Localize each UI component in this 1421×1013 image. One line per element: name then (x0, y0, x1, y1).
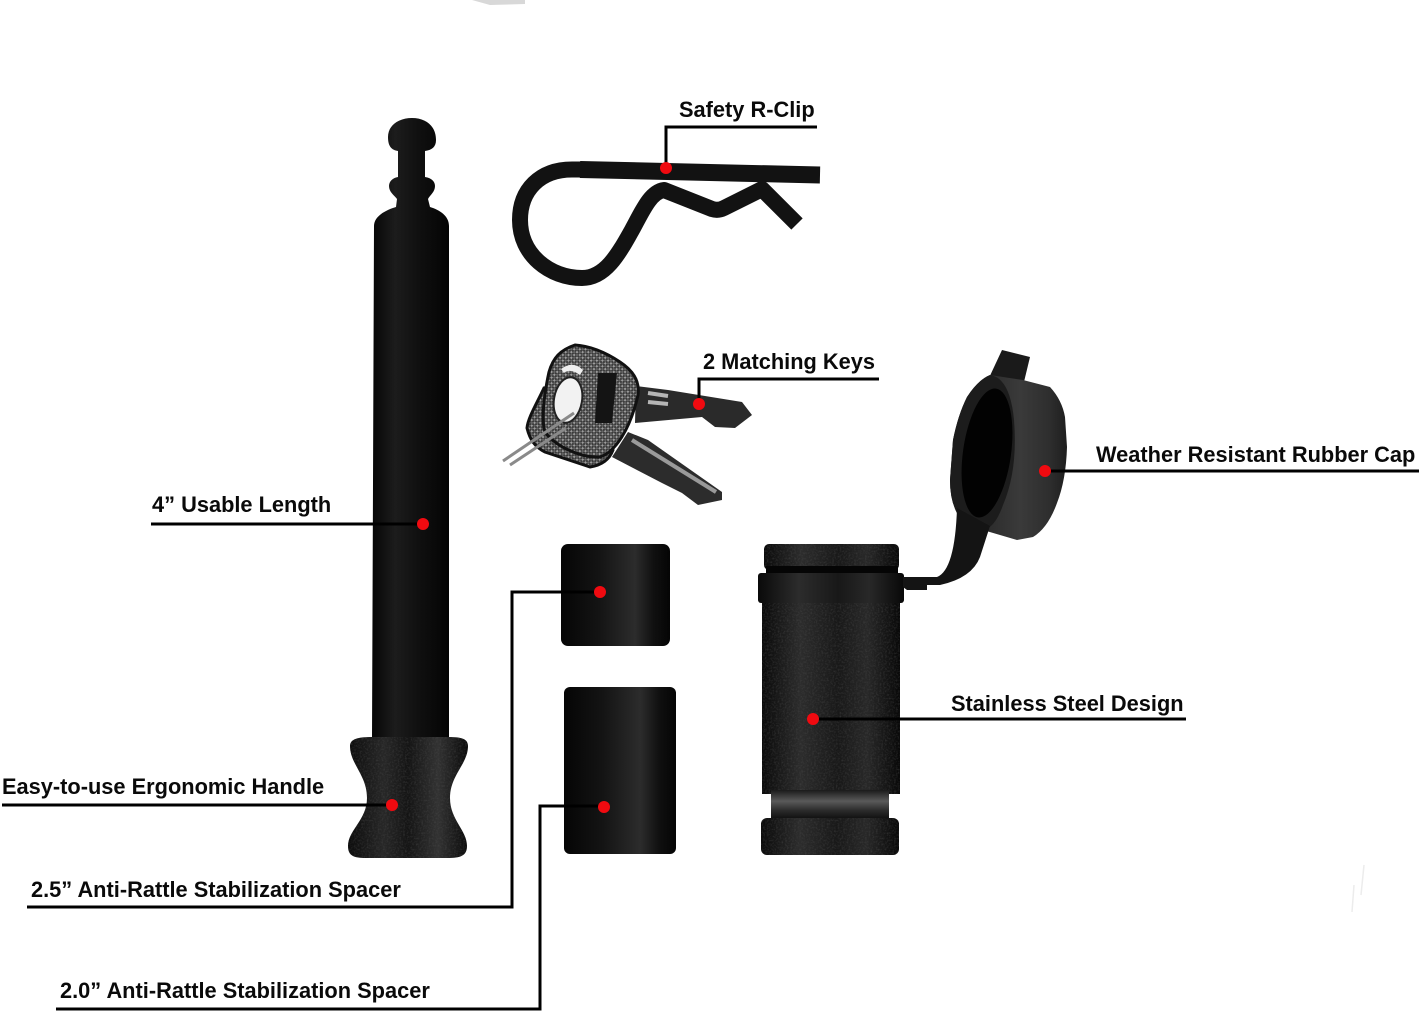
icon: safety R-clip (520, 170, 820, 278)
label: 2.5 inch spacer (27, 586, 606, 907)
label: Weather Resistant Rubber Cap: Weather Resistant Rubber Cap (1096, 442, 1415, 467)
icon: 2.5 inch spacer (561, 544, 670, 646)
label: 2.0 inch spacer: 2.0” Anti-Rattle Stabilization Spacer (60, 978, 430, 1003)
icon: locking pin (348, 118, 468, 858)
faint artefact at top edge (472, 0, 525, 5)
label: 2.5 inch spacer: 2.5” Anti-Rattle Stabilization Spacer (31, 877, 401, 902)
faint artefact lines (1352, 865, 1364, 912)
icon: rubber cap (903, 350, 1067, 590)
label: Stainless Steel Design: Stainless Steel Design (951, 691, 1184, 716)
label: Easy-to-use Ergonomic Handle (2, 774, 398, 811)
label: Stainless Steel Design (807, 691, 1186, 725)
label: 4 inch usable length: 4” Usable Length (152, 492, 331, 517)
label: 2 Matching Keys (693, 349, 879, 410)
label: 2 Matching Keys: 2 Matching Keys (703, 349, 875, 374)
icon: lock barrel (758, 544, 904, 855)
label: Safety R-Clip: Safety R-Clip (679, 97, 815, 122)
icon: 2.0 inch spacer (564, 687, 676, 854)
label: Weather Resistant Rubber Cap (1039, 442, 1419, 477)
label: 4 inch usable length (151, 492, 429, 530)
label: Safety R-Clip (660, 97, 817, 174)
icon: matching keys (503, 345, 752, 505)
label: 2.0 inch spacer (56, 801, 610, 1009)
label: Easy-to-use Ergonomic Handle: Easy-to-use Ergonomic Handle (2, 774, 324, 799)
